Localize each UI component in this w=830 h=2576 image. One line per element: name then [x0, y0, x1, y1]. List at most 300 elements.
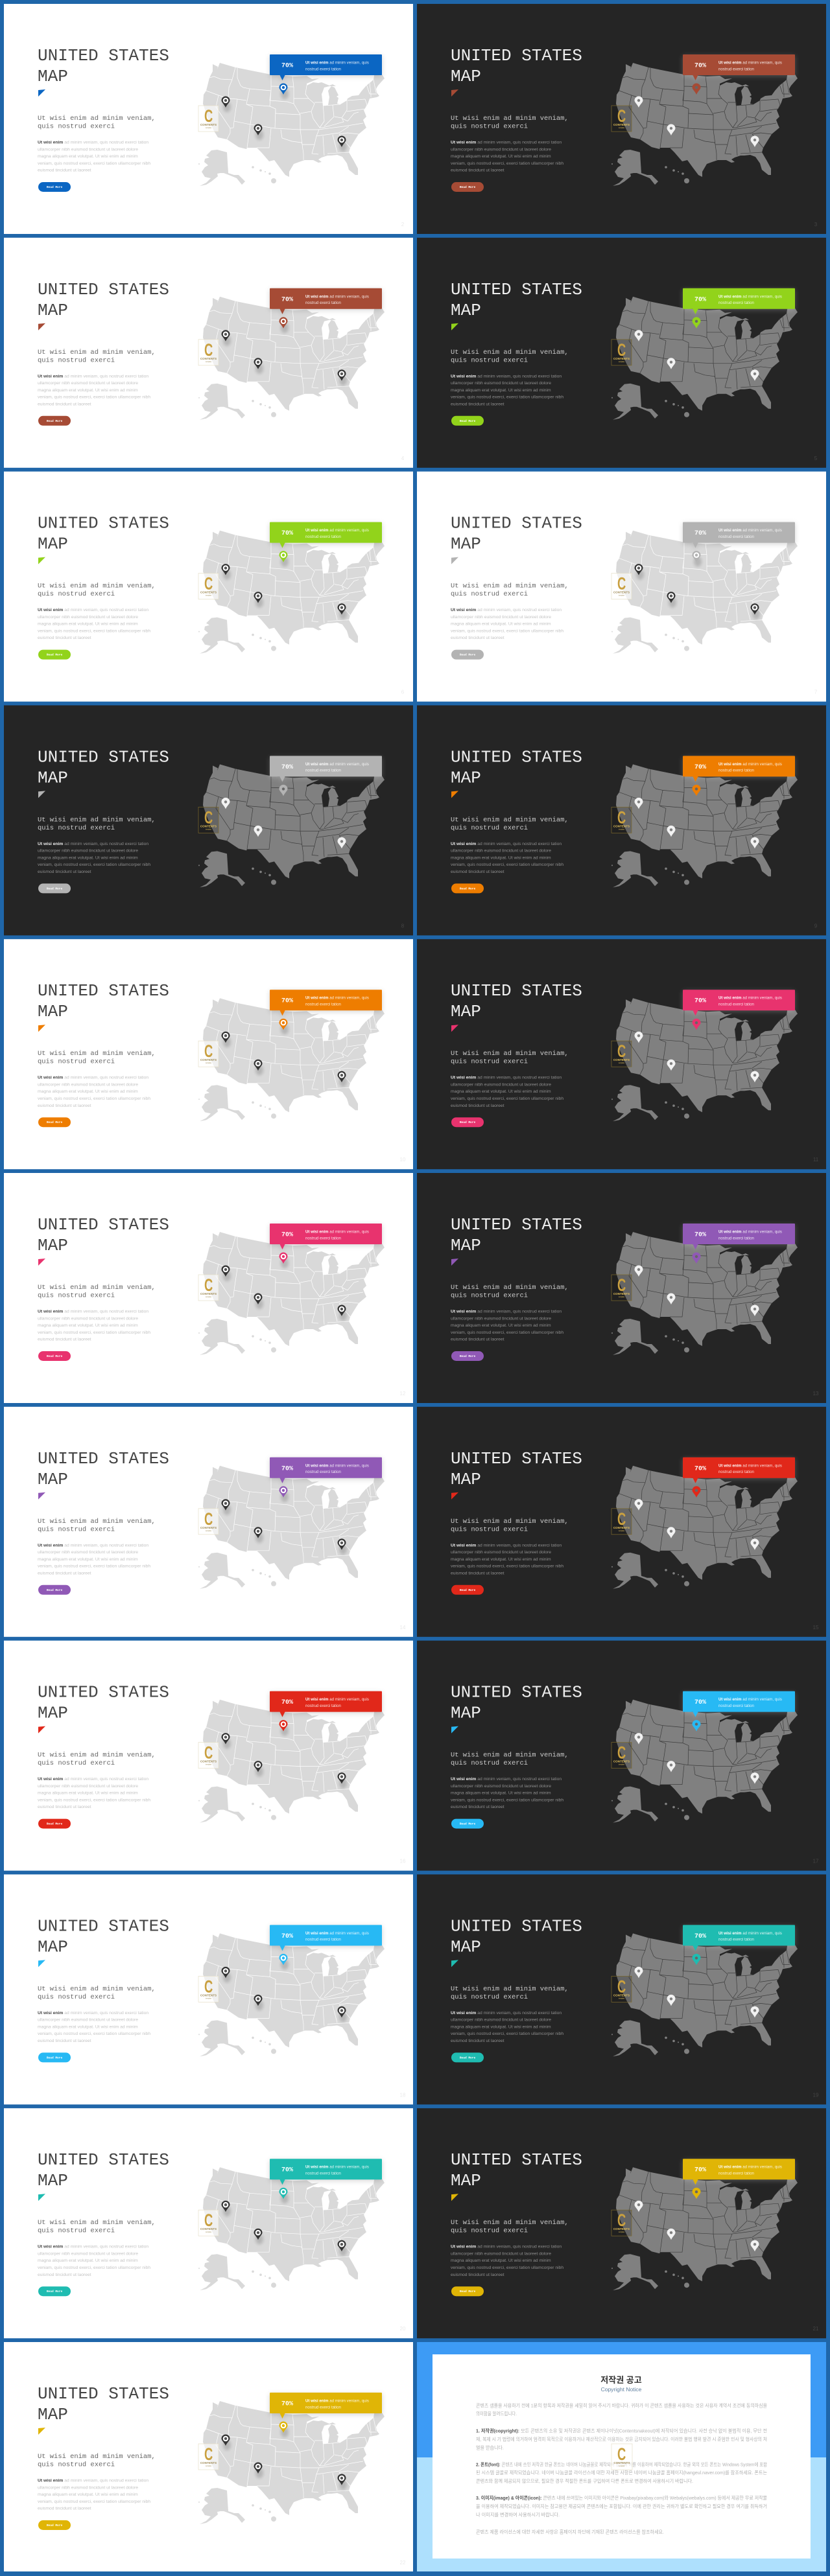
logo: C — [204, 1977, 213, 1996]
pin: accent — [279, 1954, 289, 1969]
panel: slide 3 dark brown — [417, 4, 826, 234]
map — [198, 63, 385, 186]
accent triangle — [38, 2194, 45, 2201]
button: Read More — [460, 887, 475, 890]
pin: southwest — [667, 592, 676, 608]
pin: southeast — [751, 837, 760, 853]
title: MAP — [38, 301, 68, 320]
button — [451, 1585, 484, 1595]
logo: C — [204, 1509, 213, 1529]
pin: southwest — [254, 592, 263, 608]
accent triangle — [38, 557, 45, 564]
pin: southeast — [337, 136, 347, 152]
section 1 copyright: 1. 저작권(copyright): 모든 콘텐츠의 소유 및 저작권은 콘텐츠 제이나이넛(Contentsnakeout)에 저작되어 있습니다. 사전 승낙 없이 불법적 이용, 무단 전 — [476, 2428, 767, 2434]
pin: southeast — [751, 136, 760, 152]
button: Read More — [47, 1354, 62, 1358]
callout — [683, 756, 795, 782]
body text: magna aliquam erat volutpat. Ut wisi enim ad minim — [38, 2492, 138, 2497]
subheading: quis nostrud exerci — [38, 1292, 115, 1300]
panel: slide 21 dark yellow — [417, 2108, 826, 2338]
section 2 font: 된 시스템 글꼴로 제작되었습니다. 네이버 나눔글꼴 라이선스에 대한 자세한 사항은 네이버 나눔글꼴 홈페이지(hangeul.naver.com)를 참조하세요. 폰트는 — [476, 2470, 767, 2476]
logo: template — [619, 127, 625, 129]
logo: CONTENTS — [613, 2461, 630, 2465]
body text: euismod tincidunt ut laoreet — [451, 168, 504, 173]
button — [38, 2520, 71, 2530]
pin: southeast — [751, 2006, 760, 2022]
pin: southwest — [667, 358, 676, 374]
subheading: Ut wisi enim ad minim veniam, — [38, 1050, 156, 1058]
logo: CONTENTS — [613, 1058, 630, 1062]
page number: 2 — [401, 222, 405, 227]
pin: southwest — [254, 2229, 263, 2244]
pin: southwest — [254, 124, 263, 140]
pin: accent — [693, 1252, 702, 1268]
logo — [198, 1509, 219, 1535]
callout: 70% — [281, 1699, 293, 1706]
body text: Ut wisi enim ad minim veniam, quis nostrud exerci tation — [38, 2011, 148, 2015]
logo: CONTENTS — [200, 591, 217, 594]
callout: 70% — [694, 1699, 706, 1706]
subheading: quis nostrud exerci — [451, 1292, 528, 1300]
panel: slide 20 light teal — [4, 2108, 413, 2338]
accent triangle — [451, 1025, 458, 1032]
logo — [611, 574, 632, 599]
body text: magna aliquam erat volutpat. Ut wisi enim ad minim — [451, 2258, 551, 2263]
pin: southeast — [337, 1538, 347, 1555]
body text: veniam, quis nostrud exerci, exerci tation ullamcorper nibh — [38, 395, 150, 400]
page number: 17 — [813, 1859, 819, 1864]
pin: accent — [279, 1019, 289, 1034]
logo: template — [206, 127, 212, 129]
logo: CONTENTS — [613, 1760, 630, 1763]
pin: southeast — [337, 2240, 347, 2256]
map — [198, 998, 385, 1121]
button: Read More — [460, 419, 475, 423]
page number: 19 — [813, 2092, 819, 2098]
logo — [198, 340, 219, 366]
subheading: Ut wisi enim ad minim veniam, — [38, 1985, 156, 1993]
panel: slide 2 light blue — [4, 4, 413, 234]
logo: C — [617, 2210, 626, 2230]
callout: 70% — [281, 1933, 293, 1940]
accent triangle — [451, 89, 458, 97]
pin: southeast — [751, 603, 760, 620]
panel: slide 17 dark cyan — [417, 1641, 826, 1871]
map — [198, 297, 385, 420]
body text: Ut wisi enim ad minim veniam, quis nostrud exerci tation — [451, 2245, 562, 2249]
logo: template — [206, 1997, 212, 1999]
title: MAP — [451, 1704, 481, 1723]
callout — [270, 288, 382, 314]
title: UNITED STATES — [451, 1449, 582, 1468]
title: UNITED STATES — [451, 747, 582, 767]
callout — [683, 1457, 795, 1483]
panel: slide 5 dark lime — [417, 238, 826, 468]
callout: nostrud exerci tation — [718, 1002, 754, 1006]
pin: west — [222, 1265, 231, 1281]
title: MAP — [451, 1937, 481, 1956]
logo — [198, 1743, 219, 1769]
pin: southeast — [337, 603, 347, 620]
body text: euismod tincidunt ut laoreet — [38, 636, 91, 640]
body text: magna aliquam erat volutpat. Ut wisi enim ad minim — [38, 388, 138, 393]
callout — [270, 990, 382, 1015]
callout: 70% — [281, 998, 293, 1005]
intro paragraph: 의미함을 알려드립니다. — [476, 2411, 517, 2417]
body text: euismod tincidunt ut laoreet — [38, 1338, 91, 1342]
body text: veniam, quis nostrud exerci, exerci tation ullamcorper nibh — [38, 629, 150, 633]
button: Read More — [47, 1822, 62, 1826]
accent triangle — [38, 1960, 45, 1967]
body text: magna aliquam erat volutpat. Ut wisi enim ad minim — [38, 1791, 138, 1796]
body text: ullamcorper nibh euismod tincidunt ut laoreet dolore — [38, 2018, 138, 2023]
pin: west — [222, 798, 231, 813]
body text: magna aliquam erat volutpat. Ut wisi enim ad minim — [38, 1557, 138, 1562]
body text: Ut wisi enim ad minim veniam, quis nostrud exerci tation — [451, 608, 562, 612]
title: MAP — [38, 535, 68, 554]
logo: C — [204, 2210, 213, 2230]
body text: veniam, quis nostrud exerci, exerci tation ullamcorper nibh — [38, 2266, 150, 2270]
pin: southwest — [667, 124, 676, 140]
button: Read More — [460, 2056, 475, 2060]
pin: accent — [693, 2188, 702, 2203]
title: UNITED STATES — [451, 1215, 582, 1235]
pin: accent — [279, 551, 289, 567]
logo — [611, 2210, 632, 2236]
subheading: Ut wisi enim ad minim veniam, — [38, 583, 156, 590]
pin: southwest — [667, 1527, 676, 1543]
subheading: Ut wisi enim ad minim veniam, — [38, 349, 156, 356]
logo: CONTENTS — [613, 824, 630, 828]
map — [611, 1700, 798, 1823]
body text: magna aliquam erat volutpat. Ut wisi enim ad minim — [451, 1323, 551, 1328]
callout: nostrud exerci tation — [305, 769, 341, 773]
page number: 10 — [400, 1157, 406, 1163]
body text: euismod tincidunt ut laoreet — [451, 2039, 504, 2043]
panel: slide 4 light brown — [4, 238, 413, 468]
callout: nostrud exerci tation — [305, 1704, 341, 1708]
subheading: quis nostrud exerci — [451, 1058, 528, 1066]
section 3 image and icon: 을 이용하여 제작되었습니다. 이미지는 참고용만 제공되며 콘텐츠에는 포함됩니다. 이에 관한 권리는 귀하가 별도로 확인하고 필요한 경우 여기를 취득하거 — [476, 2503, 767, 2509]
pin: accent — [279, 2421, 289, 2437]
body text: veniam, quis nostrud exerci, exerci tation ullamcorper nibh — [451, 2032, 563, 2036]
callout: Ut wisi enim ad minim veniam, quis — [718, 2165, 782, 2170]
button — [38, 1117, 71, 1127]
callout: nostrud exerci tation — [305, 2405, 341, 2409]
section 1 copyright: 벌을 받습니다. — [476, 2444, 504, 2451]
callout: Ut wisi enim ad minim veniam, quis — [305, 1931, 369, 1936]
title: UNITED STATES — [38, 1916, 169, 1936]
subheading: Ut wisi enim ad minim veniam, — [451, 1050, 569, 1058]
body text: Ut wisi enim ad minim veniam, quis nostrud exerci tation — [451, 1076, 562, 1080]
pin: southwest — [667, 1995, 676, 2010]
subheading: quis nostrud exerci — [38, 1058, 115, 1066]
logo — [611, 1509, 632, 1535]
callout — [270, 54, 382, 80]
page number: 5 — [814, 456, 818, 461]
pin: southwest — [254, 358, 263, 374]
section 2 font: 콘텐츠와 함께 제공되지 않으므로, 필요한 경우 적절한 폰트를 구입하여 다른 폰트로 변경하여 사용하시기 바랍니다. — [476, 2478, 693, 2484]
intro paragraph — [476, 2403, 767, 2417]
pin: southeast — [337, 2006, 347, 2022]
subheading: Ut wisi enim ad minim veniam, — [38, 1518, 156, 1526]
pin: southeast — [751, 1071, 760, 1087]
accent triangle — [38, 791, 45, 798]
body text: veniam, quis nostrud exerci, exerci tation ullamcorper nibh — [38, 2032, 150, 2036]
body text: ullamcorper nibh euismod tincidunt ut laoreet dolore — [38, 1784, 138, 1789]
title: UNITED STATES — [38, 1449, 169, 1468]
logo: CONTENTS — [613, 357, 630, 360]
logo: C — [617, 574, 626, 593]
panel: slide 16 light red — [4, 1641, 413, 1871]
body text: Ut wisi enim ad minim veniam, quis nostrud exerci tation — [451, 2011, 562, 2015]
panel: slide 6 light lime — [4, 472, 413, 702]
logo: C — [204, 1275, 213, 1295]
callout — [270, 1691, 382, 1717]
panel: slide 11 dark pink — [417, 939, 826, 1169]
panel: slide 12 light pink — [4, 1173, 413, 1403]
title: UNITED STATES — [451, 46, 582, 65]
logo: C — [617, 1041, 626, 1061]
callout: 70% — [281, 2167, 293, 2174]
pin: accent — [693, 1019, 702, 1034]
pin: accent — [279, 1486, 289, 1502]
subheading: quis nostrud exerci — [451, 1993, 528, 2001]
title: MAP — [451, 67, 481, 86]
logo: CONTENTS — [613, 1993, 630, 1997]
button — [451, 650, 484, 660]
logo: C — [617, 340, 626, 360]
pin: southeast — [751, 1772, 760, 1789]
pin: southeast — [337, 369, 347, 386]
button: Read More — [47, 653, 62, 657]
body text: ullamcorper nibh euismod tincidunt ut laoreet dolore — [38, 381, 138, 386]
logo: CONTENTS — [613, 123, 630, 126]
subheading: Ut wisi enim ad minim veniam, — [38, 1752, 156, 1759]
pin: west — [634, 1499, 644, 1515]
copyright heading: 저작권 공고 — [600, 2375, 642, 2385]
callout: nostrud exerci tation — [305, 301, 341, 305]
callout: 70% — [694, 1465, 706, 1472]
pin: southwest — [254, 826, 263, 841]
logo — [198, 1976, 219, 2002]
callout: Ut wisi enim ad minim veniam, quis — [718, 61, 782, 65]
body text: magna aliquam erat volutpat. Ut wisi enim ad minim — [38, 2258, 138, 2263]
callout: 70% — [281, 62, 293, 70]
title: UNITED STATES — [451, 1683, 582, 1702]
page number: 12 — [400, 1391, 406, 1397]
body text: euismod tincidunt ut laoreet — [38, 2273, 91, 2277]
panel: slide 10 light orange — [4, 939, 413, 1169]
button — [38, 416, 71, 426]
subheading: quis nostrud exerci — [38, 590, 115, 598]
body text: magna aliquam erat volutpat. Ut wisi enim ad minim — [451, 1557, 551, 1562]
title: UNITED STATES — [38, 1215, 169, 1235]
button — [451, 2052, 484, 2062]
body text: veniam, quis nostrud exerci, exerci tation ullamcorper nibh — [451, 1564, 563, 1569]
callout: 70% — [694, 62, 706, 70]
accent triangle — [38, 1492, 45, 1500]
pin: west — [634, 96, 644, 112]
logo: template — [206, 1764, 212, 1766]
logo — [611, 1275, 632, 1301]
subheading: quis nostrud exerci — [38, 123, 115, 131]
button — [38, 2286, 71, 2296]
pin: accent — [279, 785, 289, 800]
white card — [433, 2354, 811, 2559]
button: Read More — [47, 2524, 62, 2527]
body text: euismod tincidunt ut laoreet — [451, 636, 504, 640]
pin: west — [634, 1265, 644, 1281]
logo: template — [619, 1062, 625, 1064]
button — [451, 182, 484, 192]
body text: euismod tincidunt ut laoreet — [38, 870, 91, 874]
body text: ullamcorper nibh euismod tincidunt ut laoreet dolore — [451, 615, 551, 620]
body text: Ut wisi enim ad minim veniam, quis nostrud exerci tation — [451, 1309, 562, 1314]
map — [198, 1933, 385, 2056]
body text: ullamcorper nibh euismod tincidunt ut laoreet dolore — [38, 147, 138, 152]
section 3 image and icon — [476, 2495, 767, 2518]
title: MAP — [38, 2405, 68, 2424]
logo — [611, 1976, 632, 2002]
logo: C — [204, 1743, 213, 1762]
pin: west — [634, 2201, 644, 2216]
subheading: quis nostrud exerci — [451, 1526, 528, 1533]
pin: southeast — [337, 837, 347, 853]
button: Read More — [460, 1120, 475, 1124]
accent triangle — [38, 89, 45, 97]
map — [611, 63, 798, 186]
callout — [683, 522, 795, 548]
body text: ullamcorper nibh euismod tincidunt ut laoreet dolore — [38, 615, 138, 620]
title: UNITED STATES — [38, 981, 169, 1001]
logo — [611, 1743, 632, 1769]
logo: C — [617, 106, 626, 126]
title: MAP — [451, 535, 481, 554]
callout: 70% — [281, 2400, 293, 2408]
body text: ullamcorper nibh euismod tincidunt ut laoreet dolore — [38, 2251, 138, 2256]
pin: accent — [693, 317, 702, 333]
body text: veniam, quis nostrud exerci, exerci tation ullamcorper nibh — [451, 161, 563, 166]
logo: template — [206, 2465, 212, 2467]
logo: CONTENTS — [200, 1058, 217, 1062]
callout — [270, 1224, 382, 1249]
body text: Ut wisi enim ad minim veniam, quis nostrud exerci tation — [38, 1543, 148, 1548]
subheading: quis nostrud exerci — [38, 1993, 115, 2001]
body text: veniam, quis nostrud exerci, exerci tation ullamcorper nibh — [451, 1798, 563, 1802]
body text: euismod tincidunt ut laoreet — [451, 870, 504, 874]
map — [198, 1232, 385, 1355]
body text: Ut wisi enim ad minim veniam, quis nostrud exerci tation — [38, 1309, 148, 1314]
body text: magna aliquam erat volutpat. Ut wisi enim ad minim — [451, 154, 551, 159]
pin: southeast — [337, 2474, 347, 2490]
map — [611, 998, 798, 1121]
button: Read More — [47, 185, 62, 189]
button: Read More — [47, 1120, 62, 1124]
body text: veniam, quis nostrud exerci, exerci tation ullamcorper nibh — [38, 863, 150, 867]
accent triangle — [38, 1025, 45, 1032]
subheading: quis nostrud exerci — [38, 1526, 115, 1533]
map — [611, 297, 798, 420]
callout: 70% — [694, 1231, 706, 1239]
map — [611, 764, 798, 887]
logo: template — [619, 595, 625, 597]
body text: Ut wisi enim ad minim veniam, quis nostrud exerci tation — [451, 842, 562, 846]
button: Read More — [47, 2056, 62, 2060]
title: MAP — [451, 301, 481, 320]
body text: Ut wisi enim ad minim veniam, quis nostrud exerci tation — [38, 2245, 148, 2249]
button — [38, 1351, 71, 1361]
callout — [270, 1925, 382, 1951]
pin: accent — [279, 2188, 289, 2203]
button: Read More — [460, 653, 475, 657]
pin: accent — [693, 1954, 702, 1969]
section 3 image and icon: 나 이미지를 변경하여 사용하시기 바랍니다. — [476, 2512, 560, 2518]
callout: 70% — [281, 1465, 293, 1472]
callout: Ut wisi enim ad minim veniam, quis — [718, 1931, 782, 1936]
page number: 21 — [813, 2326, 819, 2332]
map — [198, 2167, 385, 2290]
pin: southwest — [254, 1761, 263, 1777]
pin: southeast — [337, 1305, 347, 1321]
subheading: Ut wisi enim ad minim veniam, — [451, 115, 569, 122]
title: UNITED STATES — [38, 2384, 169, 2404]
body text: magna aliquam erat volutpat. Ut wisi enim ad minim — [451, 1791, 551, 1796]
panel: slide 7 light grey — [417, 472, 826, 702]
logo: template — [619, 1764, 625, 1766]
accent triangle — [451, 1259, 458, 1266]
page number: 8 — [401, 923, 405, 929]
callout — [683, 990, 795, 1015]
pin: southwest — [254, 1527, 263, 1543]
logo — [198, 2444, 219, 2470]
body text: Ut wisi enim ad minim veniam, quis nostrud exerci tation — [38, 608, 148, 612]
body text: ullamcorper nibh euismod tincidunt ut laoreet dolore — [451, 2018, 551, 2023]
subheading: Ut wisi enim ad minim veniam, — [451, 583, 569, 590]
callout: 70% — [281, 296, 293, 303]
callout — [683, 2159, 795, 2185]
logo — [198, 106, 219, 132]
callout: nostrud exerci tation — [305, 1002, 341, 1006]
pin: west — [222, 96, 231, 112]
body text: magna aliquam erat volutpat. Ut wisi enim ad minim — [38, 1089, 138, 1094]
body text: euismod tincidunt ut laoreet — [451, 1104, 504, 1108]
accent triangle — [451, 1960, 458, 1967]
body text: ullamcorper nibh euismod tincidunt ut laoreet dolore — [451, 1316, 551, 1321]
body text: magna aliquam erat volutpat. Ut wisi enim ad minim — [451, 2025, 551, 2029]
accent triangle — [451, 1492, 458, 1500]
title: UNITED STATES — [38, 46, 169, 65]
accent triangle — [38, 1726, 45, 1734]
subheading: quis nostrud exerci — [451, 824, 528, 832]
logo — [198, 807, 219, 833]
logo: CONTENTS — [200, 824, 217, 828]
logo: CONTENTS — [200, 357, 217, 360]
body text: ullamcorper nibh euismod tincidunt ut laoreet dolore — [451, 147, 551, 152]
logo: CONTENTS — [200, 2461, 217, 2465]
title: MAP — [38, 67, 68, 86]
callout: 70% — [281, 530, 293, 537]
button: Read More — [47, 2290, 62, 2293]
body text: magna aliquam erat volutpat. Ut wisi enim ad minim — [451, 855, 551, 860]
title: MAP — [38, 1470, 68, 1489]
logo — [611, 807, 632, 833]
body text: Ut wisi enim ad minim veniam, quis nostrud exerci tation — [451, 1543, 562, 1548]
body text: ullamcorper nibh euismod tincidunt ut laoreet dolore — [451, 2251, 551, 2256]
page number: 20 — [400, 2326, 406, 2332]
body text: ullamcorper nibh euismod tincidunt ut laoreet dolore — [38, 1316, 138, 1321]
pin: accent — [693, 1720, 702, 1736]
